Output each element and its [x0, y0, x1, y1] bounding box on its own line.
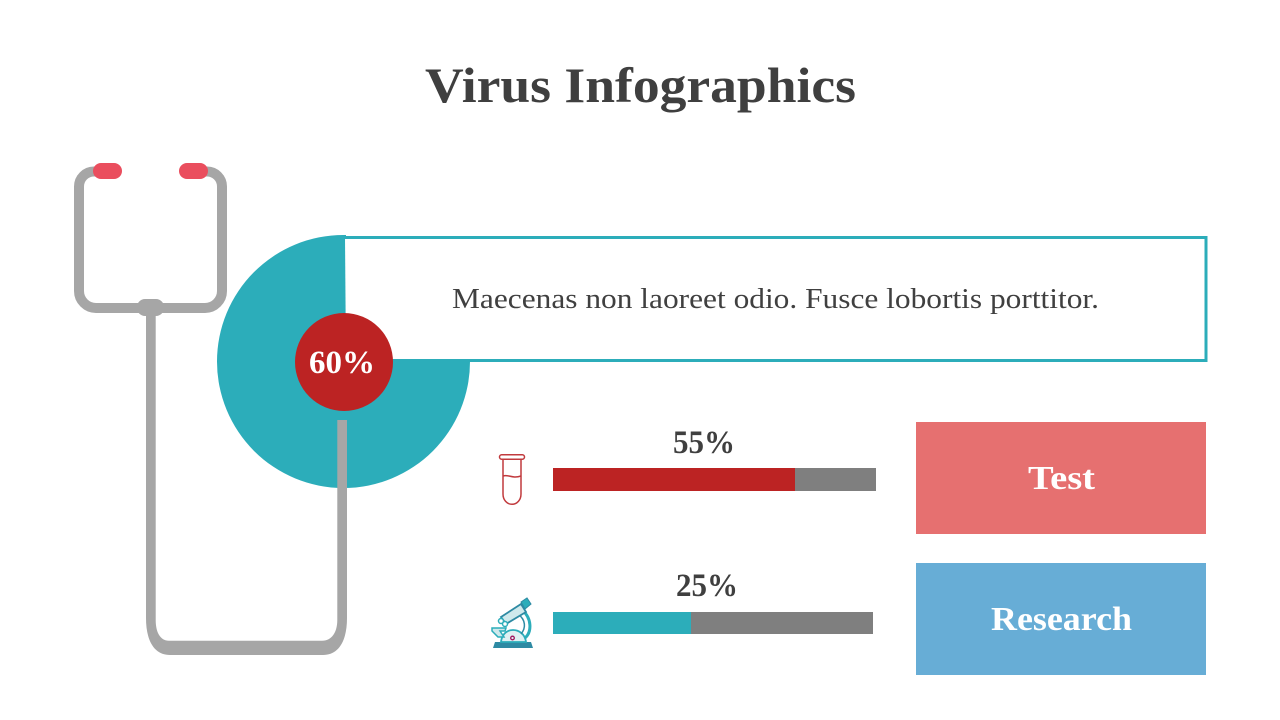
bar: test 55%: 55% [673, 425, 735, 461]
stethoscope [79, 163, 347, 655]
connector [137, 299, 164, 316]
arm [522, 610, 530, 638]
icon: test tube [500, 455, 524, 504]
base [493, 642, 533, 648]
panel: Research label: Research [991, 601, 1132, 638]
right ear tip [179, 163, 208, 179]
objective [498, 618, 504, 624]
stage [492, 628, 506, 637]
message text: Maecenas non laoreet odio. Fusce lobortis porttitor. [452, 283, 1099, 315]
bar: research 25%: 25% [676, 568, 738, 604]
teal three-quarter disc [217, 235, 470, 488]
headset tube [79, 172, 222, 308]
title: Virus Infographics [425, 57, 856, 113]
message box [345, 238, 1206, 360]
long tube [146, 310, 347, 655]
dome [501, 630, 526, 642]
red 60% badge: 60% [309, 345, 375, 381]
bar: research 25% [553, 568, 873, 634]
panel: 60% donut and message box [217, 235, 1206, 488]
left ear tip [93, 163, 122, 179]
panel: Test label: Test [1028, 460, 1096, 497]
tube [501, 604, 526, 624]
panel: Test label [916, 422, 1206, 534]
panel: Research label [916, 563, 1206, 675]
red 60% badge [295, 313, 393, 411]
bar: test 55% [553, 425, 876, 491]
icon: microscope [492, 598, 533, 648]
stage knob [511, 636, 514, 640]
